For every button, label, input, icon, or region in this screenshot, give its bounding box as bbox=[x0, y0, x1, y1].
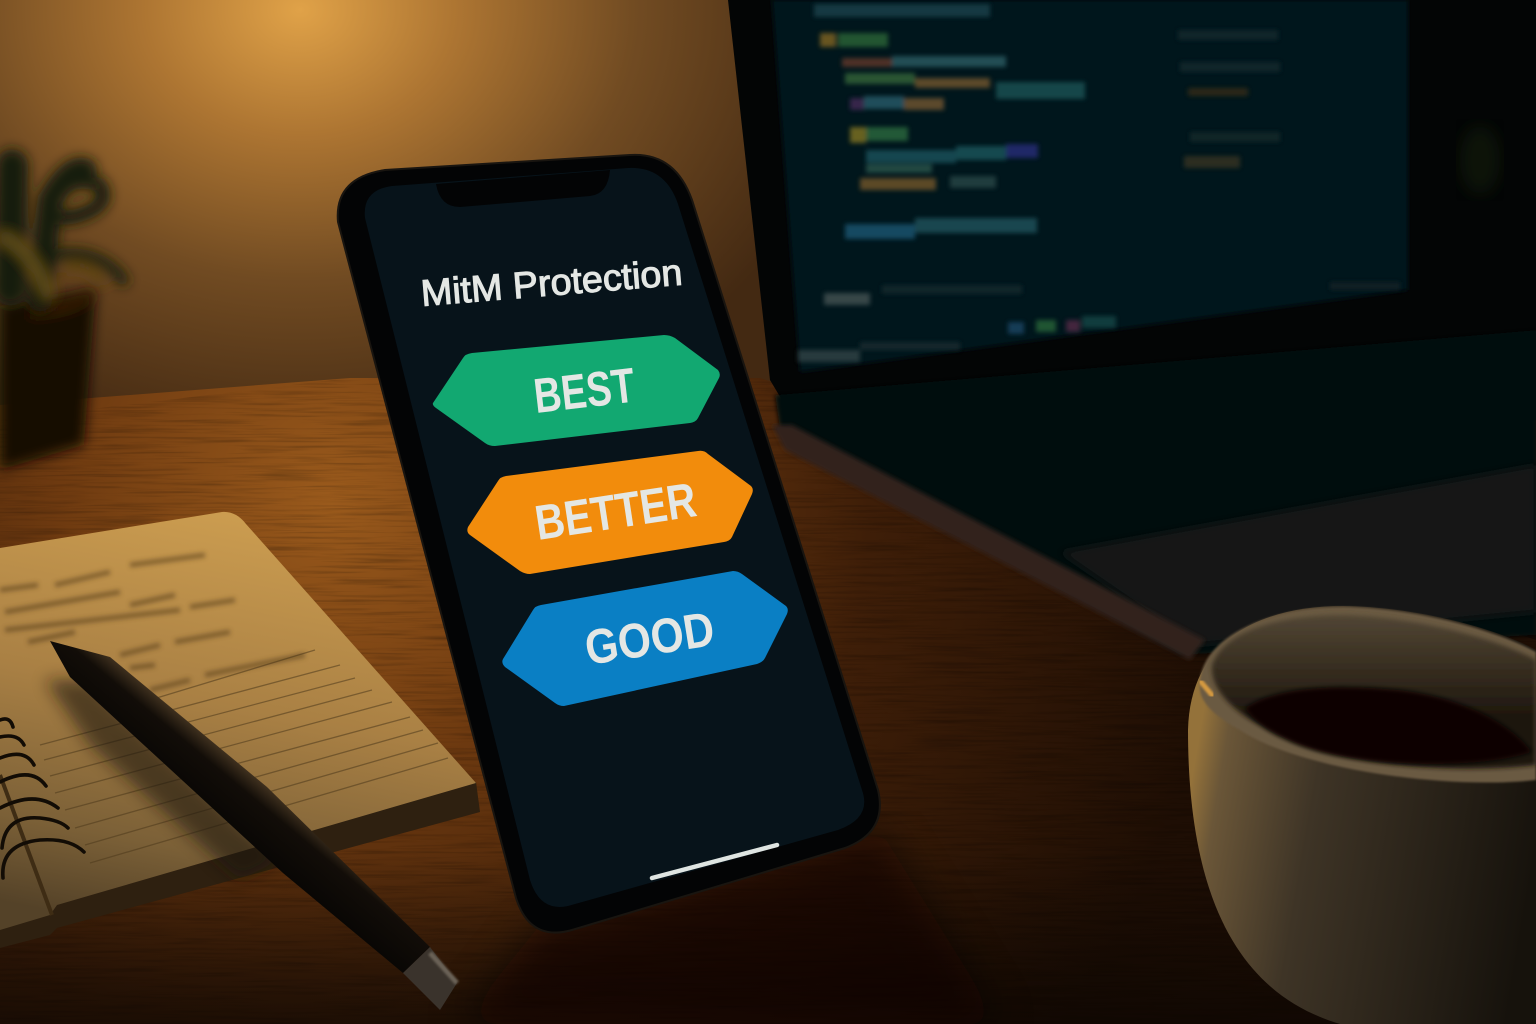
title: MitM Protection: MitM Protection bbox=[419, 252, 684, 314]
badge: BETTER bbox=[467, 451, 753, 574]
phone notch bbox=[436, 170, 610, 207]
badge: BETTER: BETTER bbox=[532, 473, 700, 551]
laptop front edge bbox=[772, 425, 1205, 660]
notebook binding strip bbox=[0, 775, 52, 915]
blurred code lines bbox=[798, 4, 1400, 362]
notebook spiral bbox=[0, 719, 84, 878]
badge: GOOD bbox=[502, 571, 788, 706]
laptop bbox=[728, 0, 1536, 660]
cup rim bbox=[1200, 607, 1536, 783]
cup inner wall bbox=[1212, 615, 1536, 769]
wooden desk bbox=[0, 378, 1536, 1024]
coffee cup bbox=[1188, 606, 1536, 1024]
plant leaves bbox=[5, 165, 123, 300]
phone bbox=[338, 155, 880, 933]
faint glow at screen right bbox=[1460, 126, 1500, 194]
plant bbox=[0, 165, 123, 470]
coffee bbox=[1245, 687, 1532, 764]
home indicator bbox=[652, 845, 777, 878]
handwriting bbox=[0, 555, 305, 690]
wrist rest bbox=[1060, 465, 1536, 645]
pen bbox=[50, 641, 457, 1010]
keyboard deck bbox=[775, 330, 1536, 655]
badge: BEST: BEST bbox=[531, 359, 638, 424]
cup body bbox=[1188, 606, 1536, 1024]
notebook page block edge bbox=[0, 782, 480, 948]
laptop screen bbox=[772, 0, 1408, 372]
wall background bbox=[0, 0, 1536, 410]
plant pot bbox=[0, 288, 96, 470]
badge: BEST bbox=[433, 335, 720, 446]
notebook bbox=[0, 512, 480, 948]
rim highlight bbox=[1201, 682, 1212, 695]
laptop lid bbox=[728, 0, 1536, 470]
badge: GOOD: GOOD bbox=[581, 602, 718, 676]
phone screen bbox=[365, 168, 864, 907]
notebook page bbox=[0, 512, 476, 930]
pen shadow bbox=[45, 680, 280, 880]
phone body bbox=[338, 155, 880, 933]
ruled lines bbox=[40, 650, 448, 863]
